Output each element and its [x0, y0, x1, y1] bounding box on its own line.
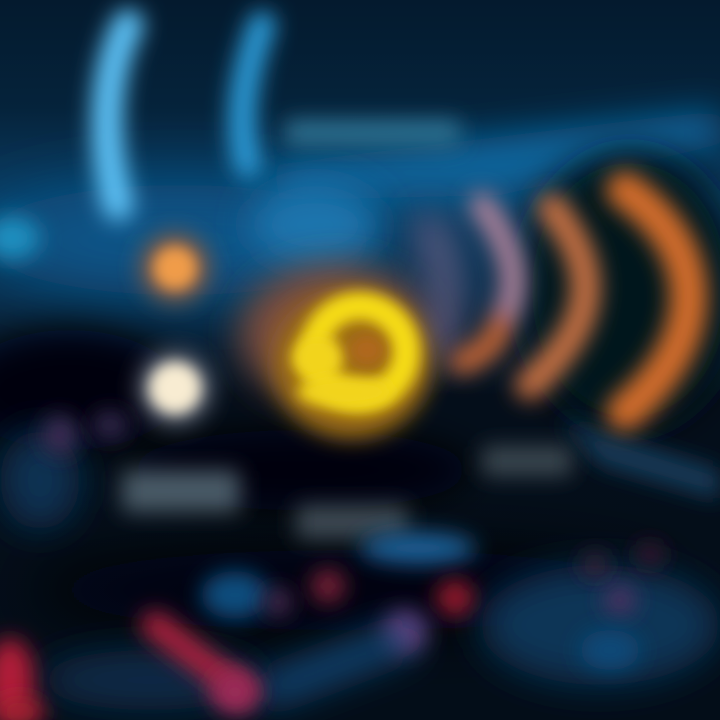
icon: yellow sun [274, 291, 430, 439]
blue pill below labels [360, 532, 476, 564]
blurred label centre [296, 505, 408, 539]
icon: right blue light beam [242, 25, 262, 165]
central blue glow [250, 185, 380, 265]
blue glow at left edge [0, 216, 40, 260]
wave arc 2 [462, 205, 513, 362]
blurred label right [482, 446, 572, 476]
blurred label left [122, 470, 240, 512]
icon: left blue light beam [107, 25, 128, 205]
small blue and red city lights [0, 411, 664, 720]
wave arc 3 [530, 208, 586, 385]
arcs: radiating waves [428, 190, 689, 412]
wave arc 1 [428, 225, 446, 350]
wave arc 4 [625, 190, 689, 412]
icon: orange dot [139, 232, 211, 304]
icon: cream dot [137, 350, 213, 426]
blurred heading [285, 120, 460, 146]
warm halo around sun [240, 265, 430, 405]
